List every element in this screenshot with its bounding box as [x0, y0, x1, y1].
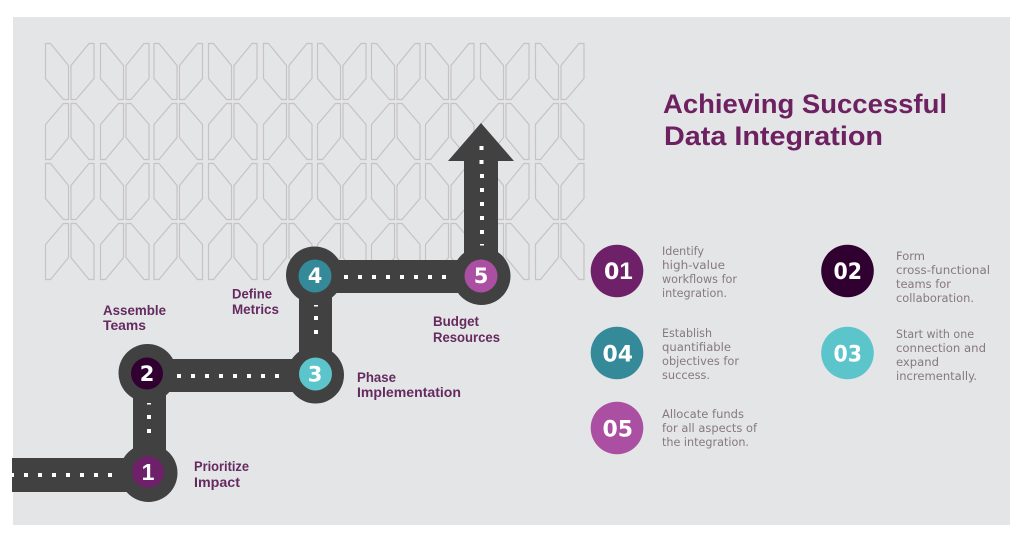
label: prioritize impact: Impact	[194, 475, 241, 490]
item 01: high-value	[662, 259, 725, 272]
item 04: Establish	[662, 327, 712, 340]
item 01: workflows for	[662, 273, 737, 286]
item 03: 03	[834, 342, 862, 368]
road node 4	[286, 246, 343, 304]
item 01: Identify	[662, 245, 704, 258]
item 03: connection and	[896, 342, 986, 355]
road node 4: 4	[308, 264, 322, 288]
arrow head	[448, 123, 514, 161]
item 03: incrementally.	[896, 370, 977, 383]
item 05: for all aspects of	[662, 422, 758, 435]
road node 5: 5	[474, 264, 488, 288]
label: define metrics: Metrics	[232, 302, 279, 317]
road node 3: 3	[308, 362, 322, 386]
item 04: objectives for	[662, 355, 739, 368]
item 02: Form	[896, 250, 925, 263]
item 04: 04	[602, 342, 633, 368]
item 03: expand	[896, 356, 939, 369]
item 02: cross-functional	[896, 264, 990, 277]
road node 3	[287, 346, 344, 404]
title: Data Integration	[664, 121, 883, 151]
road node 1: 1	[142, 459, 155, 485]
background hexagon pattern	[46, 44, 584, 280]
road node 5	[452, 247, 510, 305]
label: define metrics: Define	[232, 286, 272, 302]
label: phase implementation: Implementation	[357, 385, 461, 400]
label: phase implementation: Phase	[357, 370, 396, 385]
item 03	[821, 327, 986, 383]
item 05	[591, 402, 758, 454]
label: assemble teams: Teams	[103, 318, 146, 333]
item 02: 02	[834, 260, 862, 285]
item 03: Start with one	[896, 328, 974, 341]
label: assemble teams: Assemble	[103, 303, 166, 318]
road with arrow	[10, 123, 514, 492]
item 05: the integration.	[662, 436, 749, 449]
item 01: integration.	[662, 287, 727, 300]
road node 2	[118, 344, 176, 402]
road node 1	[120, 444, 178, 502]
item 04: quantifiable	[662, 341, 731, 354]
item 04	[591, 327, 739, 382]
title: Achieving Successful	[663, 89, 947, 119]
label: budget resources: Budget	[433, 314, 479, 329]
item 05: Allocate funds	[662, 408, 744, 421]
label: budget resources: Resources	[433, 330, 500, 345]
item 02	[821, 245, 990, 305]
road centre dots	[10, 146, 484, 477]
item 01	[591, 245, 737, 300]
item 05: 05	[602, 418, 633, 442]
item 02: collaboration.	[896, 292, 974, 305]
label: prioritize impact: Prioritize	[194, 459, 249, 474]
road node 2: 2	[140, 362, 154, 386]
item 04: success.	[662, 369, 710, 382]
item 02: teams for	[896, 278, 951, 291]
item 01: 01	[604, 258, 633, 285]
